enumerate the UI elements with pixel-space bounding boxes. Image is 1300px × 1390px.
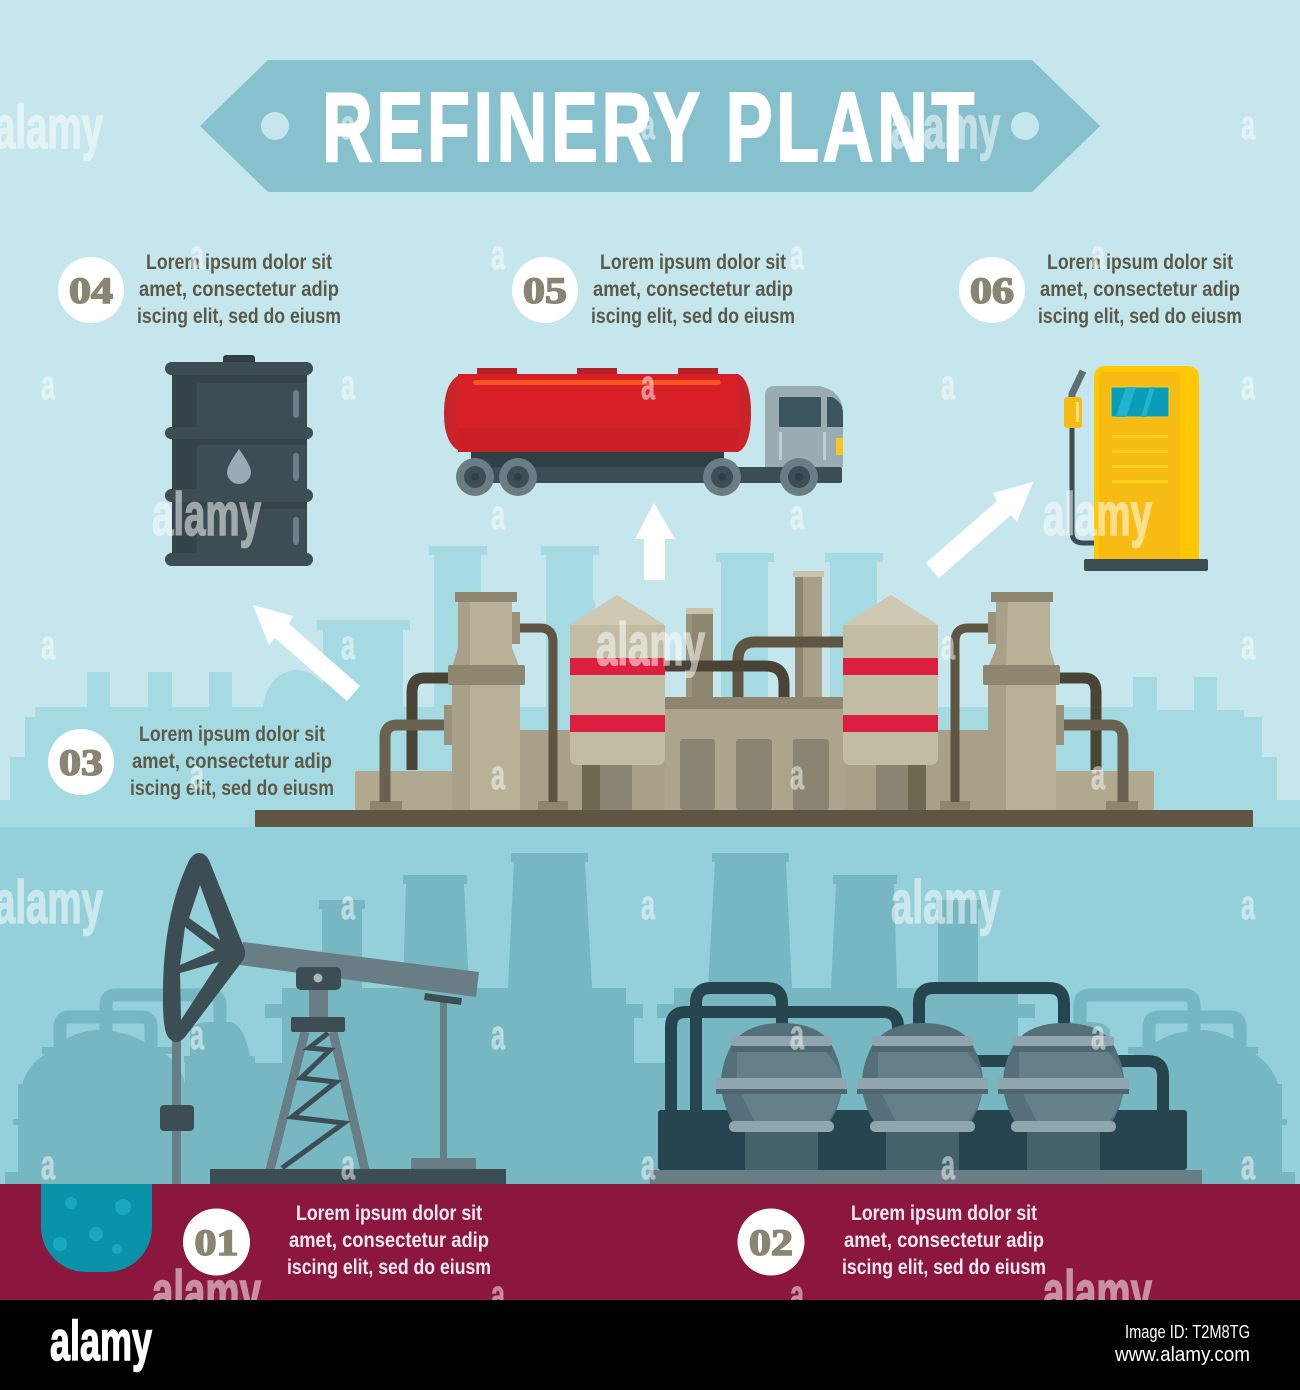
title: REFINERY PLANT [322, 72, 978, 182]
watermark overlay: alamy [152, 481, 261, 548]
step 03 callout: amet, consectetur adip [132, 750, 332, 773]
step 05 callout: Lorem ipsum dolor sit [600, 251, 786, 274]
refinery: base buildings [355, 771, 1154, 810]
watermark overlay: a [1241, 361, 1255, 408]
background: lower factory silhouettes [5, 853, 1295, 1184]
watermark overlay: a [941, 1141, 955, 1188]
footer bar [0, 1300, 1300, 1390]
watermark overlay: a [641, 1141, 655, 1188]
watermark overlay: a [491, 1271, 505, 1318]
step 06 callout: iscing elit, sed do eiusm [1038, 305, 1242, 328]
icon: oil well pool [41, 1184, 152, 1272]
step 03 callout [48, 723, 334, 800]
refinery: left column and silo [370, 592, 665, 810]
icon: oil drop [227, 449, 251, 484]
watermark overlay: alamy [596, 611, 705, 678]
step 01 callout: amet, consectetur adip [289, 1229, 489, 1252]
footer image id: Image ID: T2M8TG [1125, 1322, 1250, 1342]
arrow: up to truck [635, 503, 675, 580]
watermark overlay: a [341, 881, 355, 928]
watermark overlay: a [491, 1011, 505, 1058]
watermark overlay: a [790, 491, 804, 538]
watermark overlay: a [341, 1141, 355, 1188]
step 01 callout [183, 1202, 491, 1279]
step 05 callout: amet, consectetur adip [593, 278, 793, 301]
background: upper factory skyline [0, 546, 1300, 830]
tank 2 [857, 1023, 988, 1170]
watermark overlay: a [341, 361, 355, 408]
step 04 callout: amet, consectetur adip [139, 278, 339, 301]
arrow: to barrel [253, 605, 360, 701]
watermark overlay: a [1091, 751, 1105, 798]
watermark overlay: a [1091, 1011, 1105, 1058]
watermark overlay: a [1241, 1141, 1255, 1188]
watermark overlay: alamy [152, 1259, 261, 1326]
watermark overlay: a [491, 751, 505, 798]
step 02 callout: iscing elit, sed do eiusm [842, 1256, 1046, 1279]
refinery: central stacks [686, 608, 713, 703]
watermark overlay: a [790, 751, 804, 798]
refinery: right column and silo [843, 592, 1138, 810]
watermark overlay: a [641, 361, 655, 408]
watermark overlay: alamy [891, 869, 1000, 936]
watermark overlay: a [341, 101, 355, 148]
watermark overlay: a [491, 231, 505, 278]
watermark overlay: a [341, 621, 355, 668]
step 06 callout: 06 [970, 271, 1014, 312]
background: lower band [0, 827, 1300, 1187]
watermark overlay: a [190, 231, 204, 278]
icon: tanker truck [444, 368, 843, 496]
icon: fuel pump [1064, 366, 1208, 571]
step 04 callout: iscing elit, sed do eiusm [137, 305, 341, 328]
footer url: www.alamy.com [1114, 1344, 1250, 1366]
step 05 callout [512, 251, 795, 328]
watermark overlay: a [41, 1141, 55, 1188]
step 06 callout: amet, consectetur adip [1040, 278, 1240, 301]
step 06 callout [959, 251, 1242, 328]
watermark overlay: a [790, 231, 804, 278]
step 01 callout: iscing elit, sed do eiusm [287, 1256, 491, 1279]
background: sky [0, 0, 1300, 830]
refinery: ground slab [255, 810, 1253, 827]
icon: oil barrel [165, 355, 313, 566]
watermark overlay: alamy [891, 94, 1000, 161]
pumpjack horse head [163, 853, 245, 1042]
footer logo: alamy [50, 1309, 152, 1372]
watermark overlay: a [1241, 101, 1255, 148]
watermark overlay: a [1091, 231, 1105, 278]
step 06 callout: Lorem ipsum dolor sit [1047, 251, 1233, 274]
step 02 callout: amet, consectetur adip [844, 1229, 1044, 1252]
watermark overlay: a [190, 751, 204, 798]
step 04 callout: Lorem ipsum dolor sit [146, 251, 332, 274]
refinery plant [255, 571, 1253, 827]
step 02 callout [738, 1202, 1046, 1279]
refinery: central building [665, 697, 845, 810]
oil pumpjack [160, 853, 506, 1186]
step 01 callout: 01 [194, 1223, 238, 1264]
tank pipes [671, 988, 1163, 1115]
step 01 callout: Lorem ipsum dolor sit [296, 1202, 482, 1225]
step 05 callout: 05 [523, 271, 567, 312]
step 05 callout: iscing elit, sed do eiusm [591, 305, 795, 328]
step 03 callout: iscing elit, sed do eiusm [130, 777, 334, 800]
step 02 callout: 02 [749, 1223, 793, 1264]
watermark overlay: a [41, 621, 55, 668]
title banner [200, 60, 1100, 192]
watermark overlay: a [641, 881, 655, 928]
arrow: to fuel pump [926, 482, 1033, 578]
watermark overlay: a [41, 361, 55, 408]
watermark overlay: alamy [1043, 1259, 1152, 1326]
watermark overlay: a [1241, 881, 1255, 928]
tank 3 [998, 1023, 1129, 1170]
watermark overlay: a [1241, 621, 1255, 668]
watermark overlay: a [190, 1011, 204, 1058]
oil storage tanks [650, 988, 1202, 1184]
step 04 callout [58, 251, 341, 328]
watermark overlay: alamy [1043, 481, 1152, 548]
watermark overlay: a [941, 361, 955, 408]
step 03 callout: 03 [59, 743, 103, 784]
watermark overlay: a [790, 1011, 804, 1058]
watermark overlay: a [491, 491, 505, 538]
watermark overlay: a [790, 1271, 804, 1318]
bottom panel [0, 1184, 1300, 1300]
watermark overlay: a [641, 101, 655, 148]
tank 1 [716, 1023, 847, 1170]
watermark overlay: a [941, 621, 955, 668]
step 03 callout: Lorem ipsum dolor sit [139, 723, 325, 746]
step 04 callout: 04 [69, 271, 113, 312]
refinery: pipes centre [738, 642, 844, 700]
step 02 callout: Lorem ipsum dolor sit [851, 1202, 1037, 1225]
